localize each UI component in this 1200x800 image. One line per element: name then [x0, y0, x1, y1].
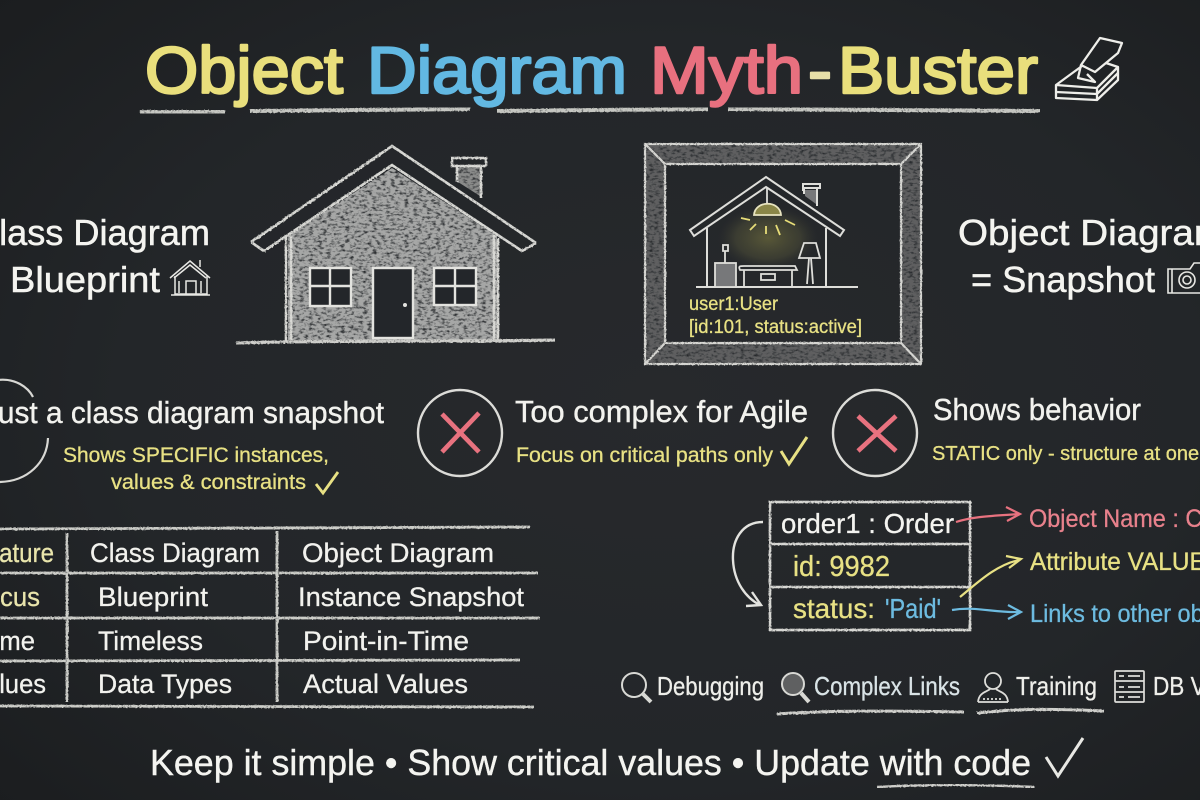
icon: trainer: [978, 673, 1008, 702]
table row: values: Actual Values: [303, 669, 468, 699]
title: Object: [145, 33, 343, 107]
table header row: Object Diagram: [302, 538, 494, 568]
icon: magnifier complex links: [782, 673, 809, 702]
comparison table: [0, 527, 540, 707]
frame outlines: [645, 144, 921, 364]
object box: [770, 502, 970, 630]
icon: small house: [170, 260, 210, 295]
check mark: [781, 437, 807, 464]
heading: object diagram snapshot: [958, 212, 1200, 300]
underline: [877, 785, 1034, 787]
title: Diagram: [367, 33, 627, 107]
underline: [977, 709, 1104, 713]
curved arrow: [733, 522, 763, 606]
panel: snapshot frame: [645, 144, 921, 364]
illustration: chalk house blueprint: [236, 146, 555, 343]
table row: time: [0, 626, 469, 656]
myth 1 circle: [0, 380, 48, 482]
house wall shading: [288, 168, 497, 340]
myth 2 cross icon: [418, 390, 502, 476]
use case: debugging: Debugging: [657, 671, 764, 701]
chimney shading: [458, 166, 480, 196]
myth 1 correction: values & constraints: [111, 471, 306, 494]
table row: focus: Instance Snapshot: [298, 582, 524, 612]
use cases row: [622, 671, 1200, 714]
myth 2: [418, 390, 808, 476]
myth 1: [0, 380, 384, 494]
roof outline: [251, 146, 536, 341]
heading: class diagram blueprint: [0, 212, 210, 300]
table grid: [0, 527, 540, 707]
object label: user1:User: [689, 294, 779, 315]
object box anatomy: [733, 502, 1200, 630]
table row: focus: [0, 582, 524, 612]
table header row: [0, 538, 494, 568]
icon: camera: [1168, 263, 1200, 293]
footer tips: [150, 738, 1083, 787]
lamp glow: [718, 206, 818, 270]
ceiling lamp: [741, 187, 795, 235]
underline: [777, 711, 964, 714]
arrow: attribute value: [960, 556, 1021, 597]
check mark: [316, 472, 338, 493]
table row: values: Data Types: [98, 669, 232, 699]
object name: order1 : Order: [781, 508, 954, 539]
small house outline: [690, 177, 858, 287]
table header row: Class Diagram: [90, 538, 260, 568]
table row: time: Timeless: [98, 626, 203, 656]
arrow: object name: [956, 507, 1020, 522]
check mark: [1046, 738, 1083, 776]
myth 2 statement: Too complex for Agile: [515, 394, 808, 429]
title: [145, 33, 1038, 107]
table row: time: Point-in-Time: [303, 626, 469, 656]
heading: class diagram blueprint: Blueprint: [10, 259, 160, 300]
myth 1 correction: Shows SPECIFIC instances,: [63, 444, 329, 467]
attribute status: [793, 593, 941, 624]
table row: values: [0, 669, 468, 699]
attribute status: 'Paid': [885, 593, 941, 624]
title: Buster: [838, 33, 1038, 107]
myth 3 cross icon: [833, 390, 917, 476]
footer text: Keep it simple • Show critical values • Update with code: [150, 742, 1031, 783]
frame border shading: [645, 144, 921, 363]
use case: complex links: Complex Links: [814, 671, 960, 701]
myth 3: [833, 390, 1200, 476]
use case: training: Training: [1016, 671, 1097, 701]
ground line: [236, 340, 555, 343]
heading: object diagram snapshot: = Snapshot: [971, 259, 1155, 300]
title underline: [140, 109, 1040, 112]
myth 1 correction: [63, 444, 329, 494]
myth 2 correction: Focus on critical paths only: [516, 444, 773, 467]
object label: [id:101, status:active]: [689, 317, 862, 338]
table row: focus: Blueprint: [98, 582, 208, 612]
myth 3 statement: Shows behavior: [933, 392, 1141, 427]
attribute id: id: 9982: [793, 551, 890, 583]
title: -: [808, 33, 832, 107]
furniture: [715, 243, 820, 287]
arrow: links: [952, 605, 1021, 619]
icon: magnifier debugging: [622, 673, 651, 702]
door and windows: [310, 268, 476, 338]
icon: chalk eraser: [1056, 38, 1122, 100]
object label: [689, 294, 862, 338]
icon: database: [1115, 671, 1144, 702]
attribute status: status:: [793, 593, 875, 624]
title: Myth: [650, 33, 803, 107]
